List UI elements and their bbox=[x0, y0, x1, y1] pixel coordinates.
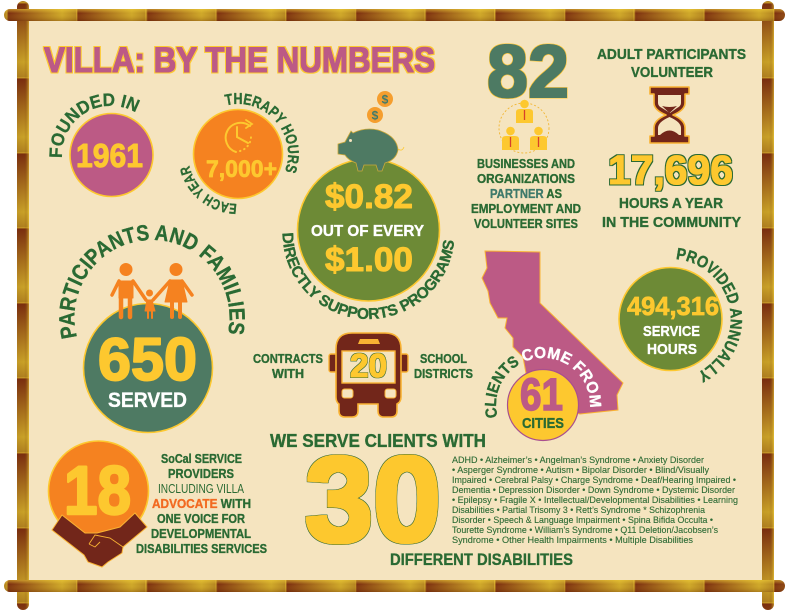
number: 82: 82 bbox=[487, 30, 569, 113]
amount: $0.82: $0.82 bbox=[325, 178, 413, 216]
curved label: therapy hours: THERAPY HOURS bbox=[224, 92, 299, 174]
text: socal service providers: ONE VOICE FOR bbox=[157, 511, 246, 526]
curved label: each year: EACH YEAR bbox=[180, 165, 236, 214]
circle: pink bbox=[70, 114, 153, 196]
text: school districts: SCHOOL bbox=[420, 352, 467, 366]
curved label: participants and families: PARTICIPANTS AND FAMILIES bbox=[59, 224, 245, 339]
text: service hours: SERVICE bbox=[643, 323, 700, 340]
text: service hours: HOURS bbox=[647, 341, 697, 358]
text: socal service providers: INCLUDING VILLA bbox=[158, 481, 244, 496]
panel: 30 disabilities bbox=[270, 431, 738, 569]
text: out of every: OUT OF EVERY bbox=[311, 223, 424, 240]
icon: handshake bbox=[52, 513, 147, 567]
text: businesses and organizations bbox=[471, 156, 581, 231]
curved label: come from: COME FROM bbox=[522, 346, 602, 407]
text: school districts: DISTRICTS bbox=[414, 367, 473, 381]
text: hours a year in the community: IN THE COMMUNITY bbox=[602, 214, 741, 231]
text: list of disabilities: ADHD • Alzheimer’s • Angelman’s Syndrome • Anxiety Disorder bbox=[452, 455, 705, 466]
icon: family bbox=[112, 263, 192, 318]
circle: orange bbox=[48, 441, 148, 541]
icon: coins bbox=[367, 91, 393, 123]
number: 30: 30 bbox=[305, 431, 441, 567]
number: 17,696: 17,696 bbox=[608, 147, 733, 193]
text: businesses and organizations: PARTNER AS bbox=[490, 186, 562, 201]
text: served: SERVED bbox=[108, 389, 187, 412]
text: different disabilities: DIFFERENT DISABILITIES bbox=[390, 550, 573, 569]
icon: clock bbox=[226, 120, 252, 152]
panel: school districts bbox=[253, 333, 473, 417]
number: 494,316: 494,316 bbox=[627, 291, 719, 321]
number: 1961: 1961 bbox=[76, 137, 143, 174]
text: socal service providers: SoCal SERVICE bbox=[161, 451, 242, 466]
text: hours a year in the community bbox=[602, 195, 741, 231]
panel: adult volunteers bbox=[597, 47, 746, 231]
text: list of disabilities: • Epilepsy • Fragile X • Intellectual/Developmental Disabilities • Learning bbox=[452, 495, 738, 506]
map: california bbox=[482, 251, 623, 414]
circle: olive bbox=[298, 159, 440, 301]
text: socal service providers: DEVELOPMENTAL bbox=[151, 526, 251, 541]
heading: adult participants volunteer: ADULT PARTICIPANTS bbox=[597, 47, 746, 63]
text: contracts with: WITH bbox=[272, 367, 304, 381]
number: 650: 650 bbox=[98, 326, 197, 393]
icon: hourglass bbox=[650, 87, 689, 143]
panel: therapy hours bbox=[180, 92, 299, 214]
panel: participants and families bbox=[59, 224, 245, 434]
text: list of disabilities: Disabilities • Partial Trisomy 3 • Rett’s Syndrome * Schizophrenia bbox=[452, 505, 706, 516]
text: businesses and organizations: EMPLOYMENT AND bbox=[471, 201, 581, 216]
panel: 18 service providers bbox=[48, 441, 267, 567]
circle: orange bbox=[194, 110, 282, 198]
panel: 61 cities bbox=[482, 250, 624, 442]
text: businesses and organizations: ORGANIZATIONS bbox=[477, 171, 575, 186]
text: businesses and organizations: VOLUNTEER SITES bbox=[474, 216, 578, 231]
amount: $1.00: $1.00 bbox=[325, 241, 413, 279]
heading: we serve clients with: WE SERVE CLIENTS WITH bbox=[270, 431, 486, 451]
curved label: directly supports programs: DIRECTLY SUPPORTS PROGRAMS bbox=[282, 233, 454, 320]
heading: adult participants volunteer: VOLUNTEER bbox=[631, 65, 713, 81]
text: list of disabilities: Disorder • Speech & Language Impairment • Spina Bifida Occulta • bbox=[452, 515, 713, 526]
panel: service hours bbox=[618, 248, 742, 383]
curved label: clients: CLIENTS bbox=[484, 356, 518, 418]
text: socal service providers: ADVOCATE WITH bbox=[152, 496, 251, 511]
icon: coins: $ bbox=[382, 92, 389, 106]
heading: adult participants volunteer bbox=[597, 47, 746, 81]
text: list of disabilities: • Asperger Syndrome • Autism • Bipolar Disorder • Blind/Visually bbox=[452, 465, 709, 476]
text: contracts with bbox=[253, 352, 323, 381]
circle: yellow bbox=[508, 370, 578, 440]
text: socal service providers: PROVIDERS bbox=[168, 466, 234, 481]
text: socal service providers bbox=[136, 451, 267, 556]
number: 7,000+: 7,000+ bbox=[206, 156, 277, 183]
number: 61: 61 bbox=[520, 369, 563, 420]
text: list of disabilities bbox=[452, 455, 738, 546]
panel: out of every dollar bbox=[282, 91, 454, 320]
text: service hours bbox=[643, 323, 700, 358]
text: contracts with: CONTRACTS bbox=[253, 352, 323, 366]
text: list of disabilities: Syndrome • Other Health Impairments • Multiple Disabilities bbox=[452, 535, 693, 546]
text: list of disabilities: Impaired • Cerebral Palsy • Charge Syndrome • Deaf/Hearing Impaired • bbox=[452, 475, 736, 486]
number: 18: 18 bbox=[64, 452, 131, 529]
icon: bus with 20 bbox=[329, 333, 408, 417]
icon: coins: $ bbox=[372, 108, 379, 122]
text: list of disabilities: Dementia • Depression Disorder • Down Syndrome • Dystemic Disorder bbox=[452, 485, 736, 496]
text: hours a year in the community: HOURS A YEAR bbox=[619, 195, 723, 212]
text: socal service providers: DISABILITIES SERVICES bbox=[136, 541, 267, 556]
circle: teal bbox=[84, 304, 212, 432]
panel: founded in 1961 bbox=[49, 93, 154, 198]
curved label: founded in: FOUNDED IN bbox=[49, 93, 140, 158]
icon: piggy bank bbox=[338, 129, 404, 171]
text: businesses and organizations: BUSINESSES AND bbox=[477, 156, 575, 171]
text: list of disabilities: Tourette Syndrome • William’s Syndrome • Q11 Deletion/Jacobsen’s bbox=[452, 525, 718, 536]
panel: 82 businesses bbox=[471, 30, 581, 231]
circle: olive bbox=[619, 268, 722, 370]
curved label: provided annually: PROVIDED ANNUALLY bbox=[676, 248, 742, 383]
title: VILLA: BY THE NUMBERS bbox=[44, 41, 435, 80]
text: cities: CITIES bbox=[522, 415, 564, 432]
text: school districts bbox=[414, 352, 473, 381]
icon: three business people bbox=[499, 100, 549, 153]
number: 20: 20 bbox=[350, 347, 387, 384]
